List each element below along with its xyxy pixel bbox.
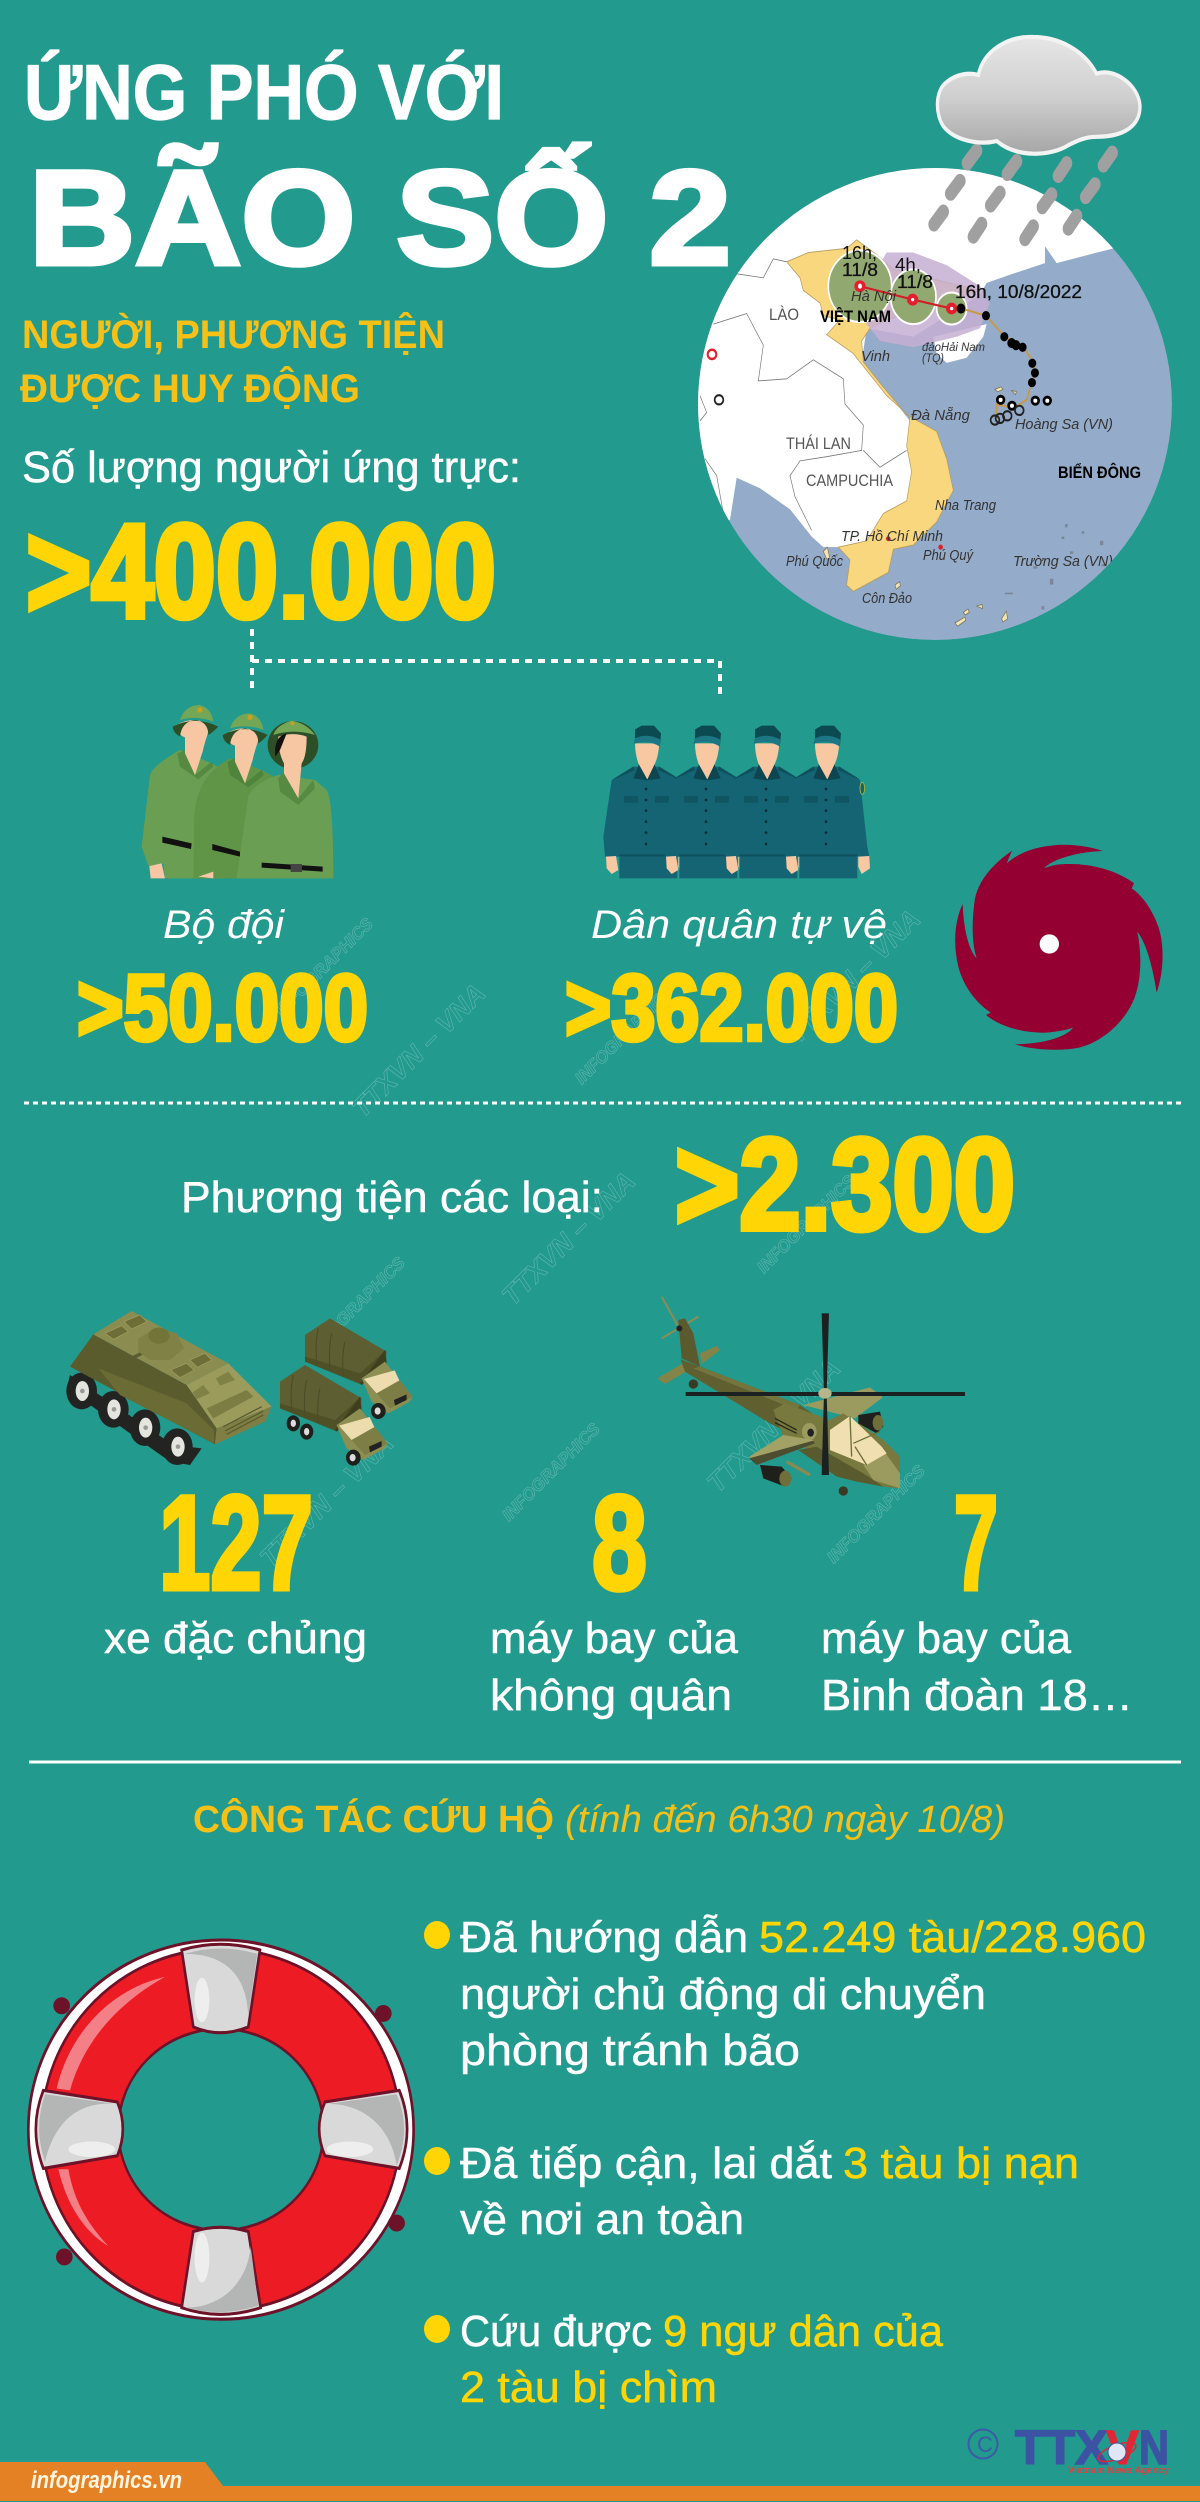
grey bands bbox=[36, 1944, 407, 2314]
map labels: THÁI LAN bbox=[786, 434, 851, 453]
watermarks: INFOGRAPHICS bbox=[823, 1461, 929, 1567]
map labels: 16h, 10/8/2022 bbox=[955, 282, 1082, 302]
subtitle bbox=[20, 311, 445, 411]
watermarks: TTXVN – VNA bbox=[346, 978, 491, 1123]
stat: Corps 18 aircraft: máy bay của bbox=[821, 1614, 1072, 1663]
left wing and pod bbox=[787, 1462, 810, 1475]
map labels: VIỆT NAM bbox=[820, 307, 891, 326]
title: BÃO SỐ 2 bbox=[29, 143, 731, 293]
bullet bbox=[424, 2315, 450, 2343]
title bbox=[24, 48, 731, 293]
highlights bbox=[57, 1977, 165, 2246]
icon: lifebuoy bbox=[28, 1940, 414, 2319]
militia 3 bbox=[723, 726, 810, 878]
forecast circles bbox=[828, 250, 892, 322]
bullet bbox=[424, 2147, 450, 2175]
band glints bbox=[68, 1978, 373, 2283]
rescue item 3: 9 ngư dân của bbox=[663, 2307, 944, 2356]
truck rear bbox=[305, 1318, 413, 1419]
icon: armored vehicle and trucks bbox=[66, 1311, 413, 1466]
icon: helicopter bbox=[657, 1297, 965, 1496]
map labels: đảoHải Nam bbox=[922, 340, 985, 354]
storm points bbox=[708, 280, 1052, 550]
logo: TTXVN: Vietnam News Agency bbox=[1068, 2465, 1170, 2476]
militia 1 bbox=[603, 726, 690, 878]
tail rotor bbox=[662, 1297, 698, 1338]
watermarks: INFOGRAPHICS bbox=[271, 914, 377, 1020]
heading: rescue work: CÔNG TÁC CỨU HỘ bbox=[193, 1796, 554, 1841]
label: vehicles: Phương tiện các loại: bbox=[181, 1173, 603, 1222]
watermarks: TTXVN – VNA bbox=[254, 1428, 399, 1573]
rescue item 2 bbox=[424, 2139, 1079, 2244]
armored vehicle bbox=[66, 1311, 272, 1465]
rescue item 3: Cứu được bbox=[460, 2307, 652, 2356]
rescue item 2: Đã tiếp cận, lai dắt bbox=[460, 2139, 832, 2188]
outer rope ring bbox=[28, 1940, 414, 2319]
watermarks: TTXVN – VNA bbox=[781, 904, 926, 1049]
watermarks: INFOGRAPHICS bbox=[498, 1419, 604, 1525]
footer band bbox=[0, 2462, 1200, 2501]
right pod bbox=[858, 1412, 883, 1433]
sea bbox=[698, 168, 1172, 640]
logo: TTXVN: TTX bbox=[1015, 2422, 1108, 2475]
stat: Corps 18 aircraft bbox=[821, 1469, 1133, 1720]
map labels: TP. Hồ Chí Minh bbox=[841, 528, 943, 545]
stat: Corps 18 aircraft: 7 bbox=[954, 1469, 998, 1618]
storm track forecast bbox=[865, 286, 946, 308]
divider solid bbox=[29, 1760, 1181, 1764]
rescue item 1 bbox=[424, 1913, 1146, 2075]
map labels: (TQ) bbox=[922, 351, 944, 365]
number: Dan quan tu ve: >362.000 bbox=[565, 955, 898, 1060]
logo: TTXVN bbox=[968, 2422, 1170, 2476]
Vietnam bbox=[787, 240, 980, 591]
map labels: Hà Nội bbox=[851, 288, 897, 305]
soldier 3 bbox=[237, 721, 333, 878]
watermarks: INFOGRAPHICS bbox=[753, 1171, 859, 1277]
watermarks: INFOGRAPHICS bbox=[571, 982, 677, 1088]
label: Bo doi: Bộ đội bbox=[163, 903, 285, 947]
footer site name: infographics.vn bbox=[31, 2467, 182, 2494]
icon: storm bbox=[955, 845, 1163, 1050]
stat: air force aircraft: máy bay của bbox=[490, 1614, 739, 1663]
militia 2 bbox=[663, 726, 750, 878]
band shading bbox=[39, 1948, 404, 2312]
map globe bbox=[698, 168, 1172, 640]
forecast cone bbox=[867, 253, 990, 347]
militia 4 bbox=[783, 726, 870, 878]
label: number of people on duty: Số lượng người ứng trực: bbox=[22, 443, 521, 492]
logo: TTXVN: V bbox=[1106, 2422, 1139, 2475]
label: Dan quan tu ve: Dân quân tự vệ bbox=[591, 903, 887, 947]
rain drops bbox=[934, 151, 1112, 239]
canopy bbox=[830, 1416, 887, 1465]
soldier 1 bbox=[142, 705, 227, 878]
rotors bbox=[686, 1388, 965, 1400]
fuselage bbox=[773, 1403, 900, 1488]
rescue item 1: Đã hướng dẫn bbox=[460, 1913, 748, 1962]
rescue item 2: 3 tàu bị nạn bbox=[843, 2139, 1079, 2188]
map labels: Trường Sa (VN) bbox=[1013, 553, 1113, 570]
map labels: LÀO bbox=[769, 305, 799, 324]
map labels: Côn Đảo bbox=[862, 590, 912, 607]
stat: air force aircraft: 8 bbox=[592, 1469, 647, 1618]
land mass bbox=[698, 168, 1114, 548]
map labels: Nha Trang bbox=[935, 497, 997, 514]
map labels: Hoàng Sa (VN) bbox=[1015, 416, 1113, 433]
map labels: Phú Quốc bbox=[786, 553, 843, 570]
stat: special vehicles bbox=[104, 1469, 367, 1663]
right wing bbox=[803, 1387, 883, 1418]
map labels: Vinh bbox=[861, 348, 890, 365]
cloud bbox=[937, 37, 1140, 154]
map labels: 16h, bbox=[842, 243, 877, 263]
stat: air force aircraft bbox=[490, 1469, 739, 1720]
red ring bbox=[42, 1949, 400, 2310]
icon: army soldiers bbox=[142, 705, 333, 878]
stat: special vehicles: xe đặc chủng bbox=[104, 1614, 367, 1663]
Hainan bbox=[933, 324, 987, 363]
storm track past bbox=[962, 309, 1035, 419]
map labels: 4h, bbox=[895, 255, 921, 275]
title: ỨNG PHÓ VỚI bbox=[24, 48, 504, 136]
dashed connector bbox=[252, 629, 720, 698]
map labels: 11/8 bbox=[842, 260, 878, 280]
subtitle: NGƯỜI, PHƯƠNG TIỆN bbox=[22, 311, 445, 357]
number: Bo doi: >50.000 bbox=[77, 955, 368, 1060]
watermarks: TTXVN – VNA bbox=[496, 1166, 641, 1311]
rescue item 3 bbox=[424, 2307, 944, 2412]
engine bbox=[802, 1423, 817, 1440]
truck front bbox=[280, 1365, 388, 1466]
country borders bbox=[700, 259, 907, 530]
stat: special vehicles: 127 bbox=[159, 1469, 313, 1618]
watermarks: TTXVN – VNA bbox=[701, 1353, 846, 1498]
big number: people: >400.000 bbox=[26, 498, 496, 646]
islands bbox=[823, 387, 1016, 626]
watermarks: INFOGRAPHICS bbox=[303, 1253, 409, 1359]
heading: rescue work: (tính đến 6h30 ngày 10/8) bbox=[565, 1799, 1005, 1841]
divider dotted bbox=[24, 1102, 1182, 1104]
icon: rain cloud bbox=[934, 37, 1140, 239]
tail boom bbox=[681, 1359, 837, 1433]
copyright mark: C bbox=[977, 2432, 993, 2457]
rescue item 3: 2 tàu bị chìm bbox=[460, 2363, 717, 2412]
bullet bbox=[424, 1921, 450, 1949]
rescue item 1: 52.249 tàu/228.960 bbox=[759, 1913, 1146, 1962]
rescue item 1: phòng tránh bão bbox=[460, 2026, 800, 2075]
map labels: CAMPUCHIA bbox=[806, 471, 894, 490]
subtitle: ĐƯỢC HUY ĐỘNG bbox=[20, 365, 360, 411]
stat: air force aircraft: không quân bbox=[490, 1671, 732, 1720]
rescue item 2: về nơi an toàn bbox=[460, 2195, 744, 2244]
map labels: Phú Quý bbox=[923, 547, 974, 564]
logo: TTXVN: N bbox=[1139, 2422, 1169, 2475]
copyright mark bbox=[968, 2430, 998, 2458]
heading: rescue work bbox=[193, 1796, 1005, 1841]
soldier 2 bbox=[193, 713, 277, 878]
rescue item 1: người chủ động di chuyển bbox=[460, 1970, 986, 2019]
map labels bbox=[769, 243, 1141, 607]
number: vehicles: >2.300 bbox=[675, 1111, 1015, 1257]
map labels: BIỂN ĐÔNG bbox=[1058, 463, 1141, 482]
globe emblem bbox=[1096, 2439, 1138, 2465]
tail fin bbox=[678, 1318, 700, 1367]
stat: Corps 18 aircraft: Binh đoàn 18… bbox=[821, 1671, 1133, 1720]
rope knots bbox=[53, 1997, 405, 2265]
map labels: 11/8 bbox=[897, 272, 933, 292]
watermarks bbox=[254, 904, 929, 1573]
map labels: Đà Nẵng bbox=[911, 407, 971, 424]
icon: militia members bbox=[603, 726, 870, 878]
